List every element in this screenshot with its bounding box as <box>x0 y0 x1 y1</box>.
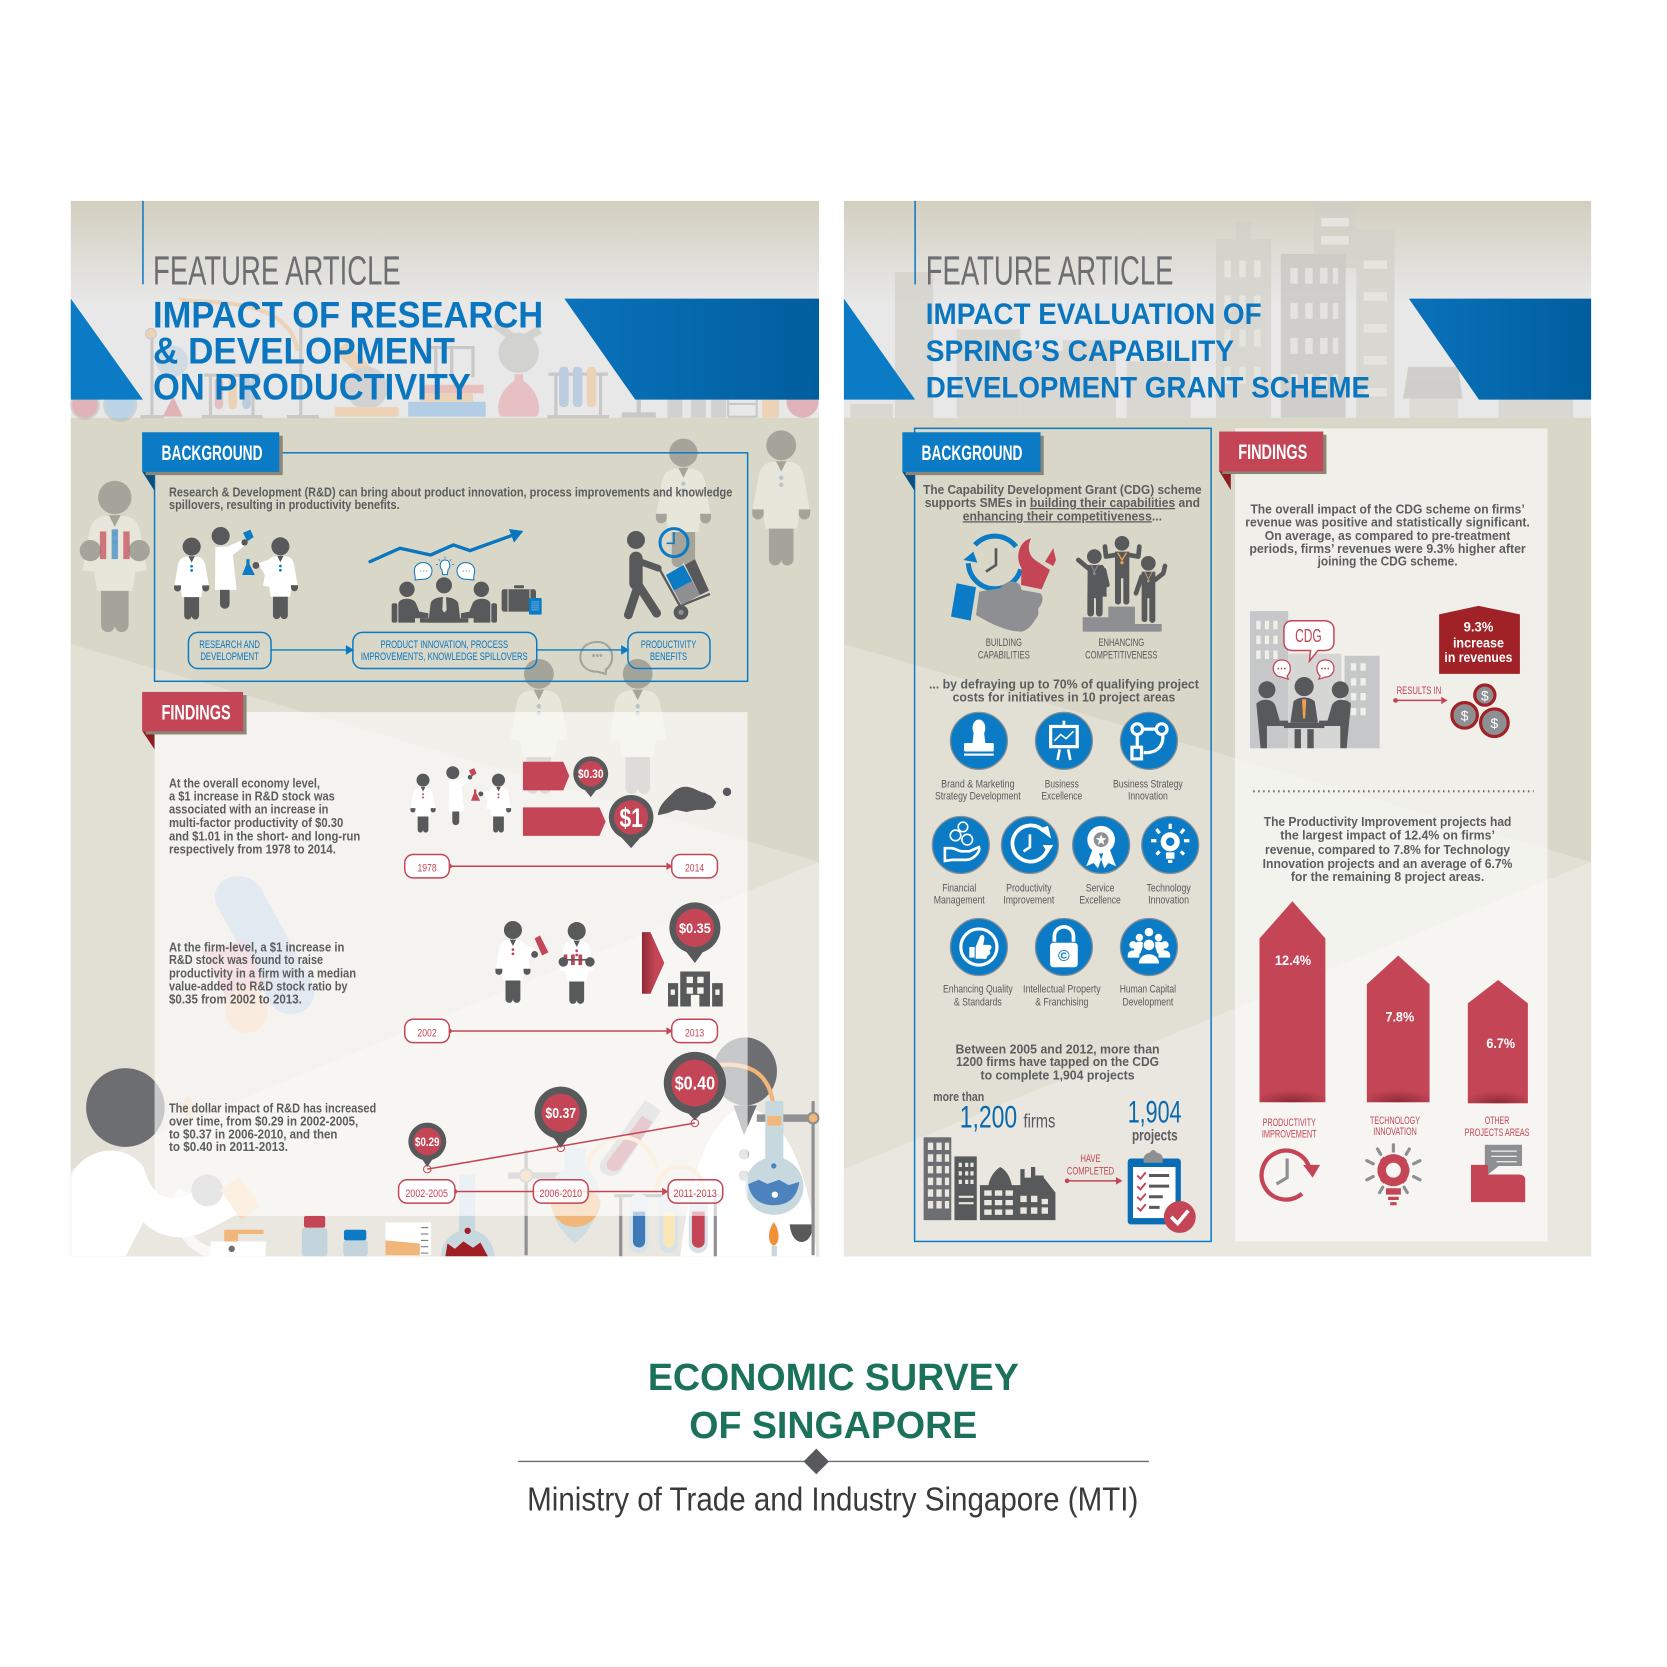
text: defraying costs <box>929 677 1200 704</box>
chart labels: PROJECTS AREAS <box>1465 1127 1529 1139</box>
finding text: productivity improvement: the largest impact of 12.4% on firms’ <box>1280 828 1495 843</box>
icon: research scientists <box>174 527 298 619</box>
capability labels <box>978 637 1157 661</box>
icon: service excellence <box>1073 816 1130 873</box>
timeline: 2002 to 2013: 2013 <box>685 1027 704 1039</box>
stat: 1,904 projects <box>1128 1093 1181 1144</box>
chart labels: IMPROVEMENT <box>1262 1128 1317 1140</box>
labels: row two: Management <box>934 894 985 906</box>
icon: building capabilities <box>951 536 1056 632</box>
bar: technology innovation 7.8%: 7.8% <box>1385 1008 1414 1024</box>
labels: row one: Strategy Development <box>935 790 1021 802</box>
timeline: 2002 to 2013 <box>405 1019 717 1043</box>
arrow <box>271 646 353 654</box>
stat: 1,200 firms: 1,200 <box>960 1099 1017 1135</box>
label and arrow: have completed: HAVE <box>1080 1153 1101 1165</box>
icon: three scientists small <box>410 766 511 833</box>
label and arrow: results in: RESULTS IN <box>1397 685 1441 697</box>
labels: row one: Brand & Marketing <box>941 779 1015 791</box>
stat: 1,200 firms: firms <box>1024 1112 1055 1133</box>
icon: technology innovation <box>1142 816 1199 873</box>
labels: row one: Business Strategy <box>1113 779 1183 791</box>
title: IMPACT EVALUATION OF <box>926 298 1262 331</box>
finding text: firm level: R&D stock was found to raise <box>169 952 323 967</box>
text: defraying costs: ... by defraying up to 70% of qualifying project <box>929 677 1200 692</box>
footer: publication name <box>648 1356 1019 1447</box>
header band <box>844 201 1591 418</box>
tag: background: BACKGROUND <box>922 441 1022 465</box>
finding text: dollar impact: to $0.37 in 2006-2010, and then <box>169 1126 337 1141</box>
section box: background <box>915 428 1211 1241</box>
timeline: three periods: 2002-2005 <box>405 1188 448 1200</box>
title: & DEVELOPMENT <box>153 330 455 372</box>
footer: publication name: OF SINGAPORE <box>689 1404 977 1447</box>
trend line <box>424 1119 699 1173</box>
faded capsule <box>202 876 314 1033</box>
title <box>153 293 543 408</box>
icon: brand and marketing <box>950 712 1007 769</box>
header band <box>71 201 819 418</box>
stat: 1,904 projects: projects <box>1132 1127 1178 1144</box>
background text <box>169 484 732 512</box>
capability labels: ENHANCING <box>1098 637 1144 649</box>
timeline: three periods <box>399 1180 723 1203</box>
finding text: economy level: At the overall economy level, <box>169 776 320 791</box>
tag: background <box>142 432 283 491</box>
finding text: productivity improvement: for the remaining 8 project areas. <box>1291 869 1484 884</box>
arrows to dollar values <box>523 762 606 836</box>
pin: $0.35 <box>669 902 720 963</box>
icon: red clock <box>1262 1151 1320 1200</box>
labels: row three <box>943 984 1176 1008</box>
tag: findings: FINDINGS <box>162 701 231 725</box>
labels: row three: & Franchising <box>1035 996 1088 1008</box>
title <box>926 298 1370 405</box>
label and arrow: results in <box>1393 685 1448 704</box>
skyline windows <box>1224 218 1387 396</box>
finding text: productivity improvement: Innovation projects and an average of 6.7% <box>1263 856 1512 871</box>
finding text: economy level <box>169 776 360 856</box>
icon: coins: $ <box>1481 687 1489 703</box>
icon: worker with trolley and clock <box>627 529 710 620</box>
text: firms and projects: 1200 firms have tapped on the CDG <box>956 1054 1159 1069</box>
finding text: overall impact: revenue was positive and statistically significant. <box>1245 515 1530 530</box>
section box: background <box>155 453 748 681</box>
blue banner right <box>564 299 819 400</box>
finding text: economy level: a $1 increase in R&D stock was <box>169 788 335 803</box>
map: Singapore <box>658 787 731 815</box>
finding text: economy level: multi-factor productivity of $0.30 <box>169 815 343 830</box>
finding text: overall impact: The overall impact of the CDG scheme on firms’ <box>1250 501 1525 516</box>
flow: productivity benefits <box>628 632 710 669</box>
footer rule with diamond <box>518 1449 1149 1474</box>
timeline: three periods: 2011-2013 <box>673 1188 717 1200</box>
finding text: dollar impact <box>169 1100 376 1154</box>
finding text: productivity improvement: revenue, compared to 7.8% for Technology <box>1265 842 1511 857</box>
labels: row two: Service <box>1086 883 1114 895</box>
icon: project checklist <box>1128 1150 1196 1233</box>
labels: row two: Financial <box>942 883 976 895</box>
flow: product innovation <box>353 632 537 669</box>
blue banner right <box>1409 299 1591 400</box>
icon: red folder with paper <box>1471 1145 1525 1202</box>
labels: row one: Innovation <box>1128 790 1168 802</box>
pin: $0.37 <box>535 1087 587 1148</box>
pin: $0.30 <box>573 756 608 797</box>
timeline: three periods: 2006-2010 <box>540 1188 582 1200</box>
labels: row three: Human Capital <box>1120 984 1176 996</box>
faded lab equipment in header <box>71 298 818 421</box>
bar: technology innovation 7.8% <box>1367 956 1430 1102</box>
finding text: overall impact <box>1245 501 1530 568</box>
pin: $0.40 <box>664 1052 726 1120</box>
tag: findings: FINDINGS <box>1238 440 1307 464</box>
title: ON PRODUCTIVITY <box>153 366 471 408</box>
pin: $0.29: $0.29 <box>415 1136 440 1149</box>
icon: financial management <box>932 816 989 873</box>
finding text: firm level: value-added to R&D stock ratio by <box>169 979 348 994</box>
background text <box>923 482 1202 523</box>
finding text: dollar impact: to $0.40 in 2011-2013. <box>169 1139 288 1154</box>
icon: coins: $ <box>1461 708 1469 724</box>
callout: 9.3% increase in revenues: in revenues <box>1444 649 1513 665</box>
pin: $0.30: $0.30 <box>578 768 604 781</box>
finding text: overall impact: joining the CDG scheme. <box>1317 553 1458 568</box>
icon: firm buildings <box>924 1137 1055 1220</box>
footer: ministry name: Ministry of Trade and Industry Singapore (MTI) <box>527 1480 1138 1517</box>
icon: productivity improvement <box>1001 816 1058 873</box>
chart labels: TECHNOLOGY <box>1370 1115 1420 1127</box>
tag: findings <box>1219 432 1326 490</box>
finding text: overall impact: On average, as compared to pre-treatment <box>1265 528 1511 543</box>
labels: row two: Technology <box>1146 883 1191 895</box>
text: firms and projects: Between 2005 and 2012, more than <box>956 1041 1160 1056</box>
stat: 1,200 firms <box>933 1089 1055 1135</box>
bar: productivity improvement 12.4% <box>1259 901 1325 1102</box>
labels: row two: Innovation <box>1148 894 1189 906</box>
chart labels: INNOVATION <box>1373 1126 1417 1138</box>
finding text: dollar impact: over time, from $0.29 in 2002-2005, <box>169 1114 358 1129</box>
flow: research and development: DEVELOPMENT <box>200 651 259 663</box>
title: SPRING’S CAPABILITY <box>926 335 1234 368</box>
stat: 1,904 projects: 1,904 <box>1128 1093 1181 1129</box>
background text: enhancing their competitiveness... <box>963 508 1162 523</box>
timeline: 1978 to 2014: 1978 <box>417 863 437 875</box>
capability labels: CAPABILITIES <box>978 649 1030 661</box>
icon: intellectual property <box>1035 919 1092 975</box>
tag: background <box>902 432 1044 491</box>
timeline: 2002 to 2013: 2002 <box>417 1027 437 1039</box>
finding text: firm level: $0.35 from 2002 to 2013. <box>169 991 302 1006</box>
blue banner left <box>71 299 143 400</box>
body background <box>844 418 1591 1256</box>
title: IMPACT OF RESEARCH <box>153 293 543 335</box>
capability labels: COMPETITIVENESS <box>1085 649 1157 661</box>
labels: row one: Business <box>1045 779 1079 791</box>
labels: row one <box>935 779 1183 802</box>
panel: findings <box>155 712 748 1216</box>
bar chart: impact by project type <box>1259 901 1528 1103</box>
arrow <box>537 646 628 654</box>
pin: $0.35: $0.35 <box>679 920 711 936</box>
finding text: economy level: respectively from 1978 to 2014. <box>169 841 336 856</box>
chart labels: PRODUCTIVITY <box>1263 1117 1316 1129</box>
accent rule <box>142 201 144 284</box>
bar: productivity improvement 12.4%: 12.4% <box>1275 952 1311 968</box>
icon: red gear bulb <box>1367 1145 1420 1205</box>
labels: row two: Productivity <box>1006 883 1052 895</box>
tag: findings <box>142 692 247 749</box>
callout: 9.3% increase in revenues: 9.3% <box>1464 618 1493 634</box>
panel: R&D feature article <box>71 201 819 1256</box>
footer: publication name: ECONOMIC SURVEY <box>648 1356 1019 1399</box>
icon: enhancing quality <box>950 919 1007 975</box>
icon: company building <box>668 971 723 1007</box>
labels: row three: Enhancing Quality <box>943 984 1013 996</box>
finding text: productivity improvement <box>1263 814 1512 884</box>
panel: SPRING CDG feature article <box>844 201 1591 1256</box>
faded right scientist <box>680 1037 816 1256</box>
bar: other project areas 6.7%: 6.7% <box>1486 1035 1515 1051</box>
faded background scientists: ••• <box>592 650 603 662</box>
labels: row three: Intellectual Property <box>1023 984 1101 996</box>
pin: $0.29 <box>408 1123 446 1167</box>
callout: CDG speech bubble: CDG <box>1295 626 1322 646</box>
faded city skyline <box>850 204 1573 418</box>
flow: research and development <box>188 632 271 669</box>
labels: row two: Excellence <box>1079 894 1121 906</box>
capability labels: BUILDING <box>986 637 1022 649</box>
faded flasks and tubes on the bench <box>210 1100 818 1256</box>
background text: supports SMEs in building their capabilities and <box>925 495 1200 510</box>
icon: CDG meeting in city <box>1250 611 1380 748</box>
divider dots <box>1253 790 1534 792</box>
finding text: firm level: productivity in a firm with a median <box>169 965 356 980</box>
body background <box>71 418 819 1256</box>
background text: Research & Development (R&D) can bring about product innovation, process improvements and knowledge <box>169 484 732 499</box>
finding text: economy level: associated with an increase in <box>169 802 328 817</box>
blue banner left <box>844 299 915 400</box>
stat: 1,200 firms: more than <box>933 1089 984 1104</box>
finding text: overall impact: periods, firms’ revenues were 9.3% higher after <box>1249 541 1526 556</box>
text: firms and projects <box>956 1041 1160 1082</box>
label and arrow: have completed: COMPLETED <box>1067 1165 1114 1177</box>
labels: row three: & Standards <box>954 996 1002 1008</box>
icon: coins: $ <box>1491 715 1499 731</box>
text: defraying costs: costs for initiatives in 10 project areas <box>953 689 1175 704</box>
flow: product innovation: PRODUCT INNOVATION, PROCESS <box>381 639 508 651</box>
callout: 9.3% increase in revenues <box>1439 606 1520 674</box>
title: DEVELOPMENT GRANT SCHEME <box>926 372 1370 405</box>
callout: CDG speech bubble <box>1273 621 1334 679</box>
chart labels <box>1262 1115 1529 1140</box>
text: firms and projects: to complete 1,904 projects <box>980 1067 1135 1082</box>
flow: research and development: RESEARCH AND <box>199 639 260 651</box>
finding text: productivity improvement: The Productivity Improvement projects had <box>1264 814 1511 829</box>
icon: intellectual property: © <box>1058 948 1070 965</box>
timeline: 1978 to 2014: 2014 <box>685 863 704 875</box>
labels: row one: Excellence <box>1041 790 1082 802</box>
callout: 9.3% increase in revenues: increase <box>1453 634 1504 650</box>
panel: findings <box>1235 428 1548 1241</box>
flow: product innovation: IMPROVEMENTS, KNOWLEDGE SPILLOVERS <box>361 651 528 663</box>
finding text: firm level: At the firm-level, a $1 increase in <box>169 939 344 954</box>
kicker: feature article: FEATURE ARTICLE <box>153 247 401 293</box>
labels: row three: Development <box>1122 996 1173 1008</box>
pin: $1: $1 <box>619 803 643 833</box>
background text: The Capability Development Grant (CDG) scheme <box>923 482 1202 497</box>
finding text: firm level <box>169 939 356 1006</box>
timeline: 1978 to 2014 <box>405 855 717 878</box>
accent rule <box>914 201 916 284</box>
arrow to firm value <box>642 932 664 994</box>
icon: two scientists <box>495 921 595 1004</box>
faded background scientists <box>80 430 810 794</box>
kicker: feature article: FEATURE ARTICLE <box>926 247 1173 293</box>
finding text: dollar impact: The dollar impact of R&D has increased <box>169 1100 376 1115</box>
finding text: economy level: and $1.01 in the short- and long-run <box>169 829 360 844</box>
tag: background: BACKGROUND <box>162 441 263 465</box>
labels: row two <box>934 883 1191 906</box>
flow: productivity benefits: BENEFITS <box>650 651 687 663</box>
bar: other project areas 6.7% <box>1468 980 1528 1103</box>
icon: business strategy <box>1120 712 1177 769</box>
faded bottom-left scientist <box>71 1068 260 1256</box>
pin: $0.37: $0.37 <box>545 1106 576 1122</box>
icon: rising trend and meeting <box>370 529 542 623</box>
icon: human capital <box>1120 919 1177 975</box>
flow: productivity benefits: PRODUCTIVITY <box>641 639 697 651</box>
pin: $0.40: $0.40 <box>675 1073 715 1093</box>
icon: business excellence <box>1035 712 1092 769</box>
labels: row two: Improvement <box>1003 894 1054 906</box>
background text: spillovers, resulting in productivity benefits. <box>169 497 400 512</box>
pin: $1 <box>609 795 653 848</box>
label and arrow: have completed <box>1065 1153 1122 1185</box>
icon: enhancing competitiveness <box>1078 536 1165 632</box>
icon: coins <box>1452 685 1508 737</box>
chart labels: OTHER <box>1485 1115 1509 1127</box>
